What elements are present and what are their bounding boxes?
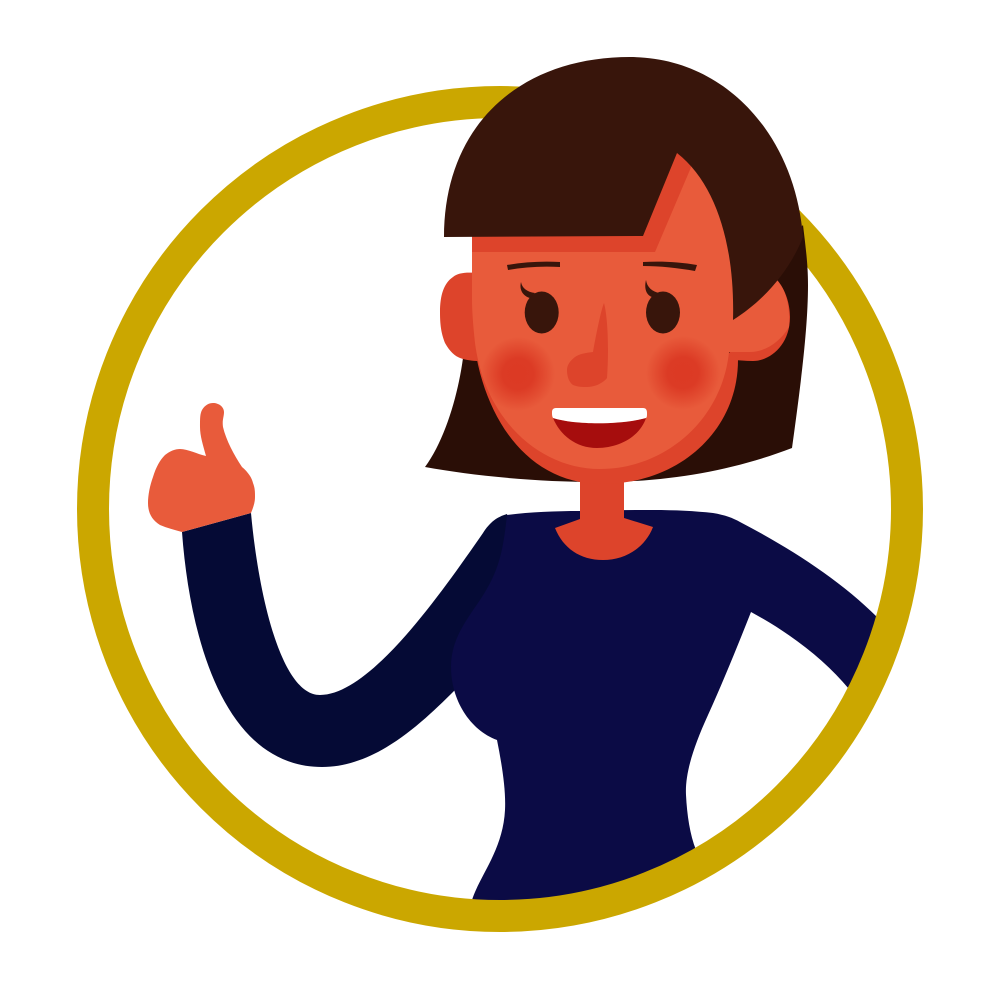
- cheeks: [486, 342, 714, 406]
- face: [472, 140, 735, 469]
- nose: [567, 303, 608, 387]
- right eyelash: [645, 280, 660, 297]
- raised arm: [182, 513, 530, 767]
- neck: [555, 470, 653, 560]
- illustration: woman giving thumbs up inside ring: [77, 57, 923, 932]
- right eyebrow: [643, 262, 697, 271]
- left eyebrow: [507, 262, 560, 270]
- gold ring: [93, 102, 907, 916]
- back hair: [425, 225, 808, 482]
- left eye: [525, 292, 559, 334]
- right cheek: [652, 342, 714, 404]
- left cheek: [486, 342, 550, 406]
- left eyelash: [520, 282, 535, 298]
- fringe shadow: [472, 148, 692, 252]
- right ear shadow: [730, 280, 790, 361]
- mouth: [553, 418, 646, 448]
- torso: [451, 510, 885, 908]
- thumbs-up hand: [148, 403, 255, 532]
- teeth: [552, 408, 647, 423]
- front hair: [444, 57, 803, 320]
- left ear: [440, 273, 480, 361]
- sweater: arm and torso: [182, 510, 885, 908]
- right ear: [725, 280, 789, 352]
- right eye: [646, 292, 680, 334]
- face shadow: [472, 140, 738, 484]
